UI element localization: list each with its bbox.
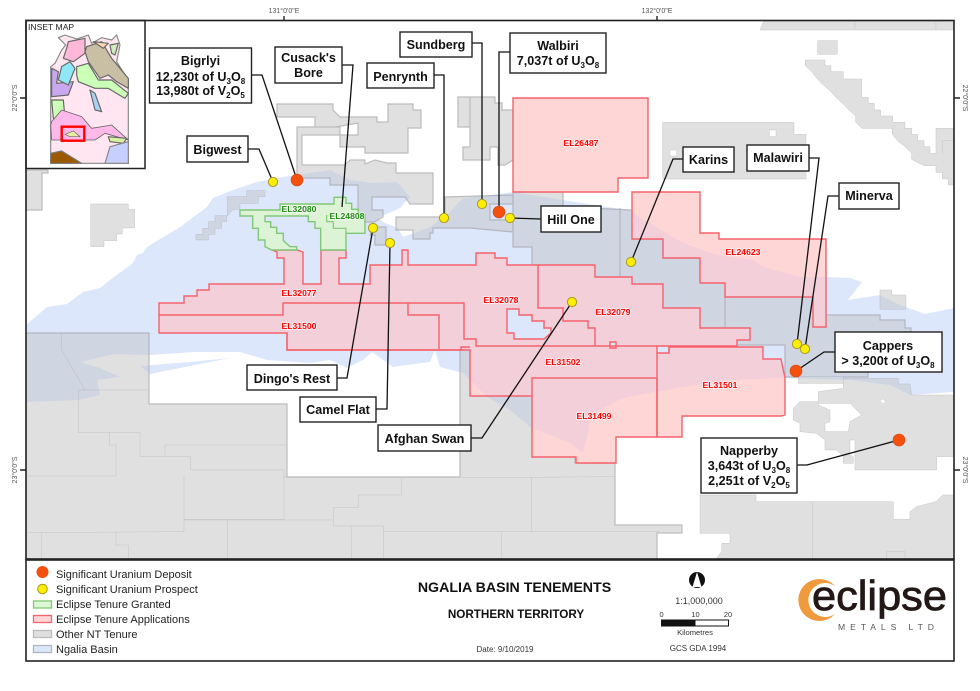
scale bar: 0 xyxy=(659,610,664,619)
callout: Cappers: Cappers xyxy=(863,339,913,353)
Eclipse tenure granted xyxy=(240,197,365,250)
tenement labels: EL32079 xyxy=(596,307,631,317)
tenement labels: EL31500 xyxy=(282,321,317,331)
legend: Significant Uranium Deposit xyxy=(56,569,192,581)
callout: Napperby: 5 xyxy=(785,481,790,490)
scale bar: GCS GDA 1994 xyxy=(670,644,727,653)
callout: Camel Flat xyxy=(300,397,376,422)
callout: Dingo's Rest: Dingo's Rest xyxy=(254,372,331,386)
callout: Bigrlyi: 8 xyxy=(241,77,246,86)
callout: Karins xyxy=(683,147,734,172)
callout: Bigrlyi: Bigrlyi xyxy=(181,54,220,68)
tenement labels: EL32080 xyxy=(282,204,317,214)
legend xyxy=(34,566,198,656)
callout: Walbiri: 8 xyxy=(595,61,600,70)
bottom panel xyxy=(26,560,954,661)
callout: Bigrlyi: 3 xyxy=(226,77,232,86)
tenement labels: EL24623 xyxy=(726,247,761,257)
callout: Cappers xyxy=(835,332,942,372)
Ngalia Basin xyxy=(26,170,954,428)
map frame and graticule xyxy=(11,7,969,559)
map frame and graticule: 23°0'0"S xyxy=(961,457,969,484)
map frame and graticule: 22°0'0"S xyxy=(11,84,19,111)
callout: Walbiri: Walbiri xyxy=(537,39,579,53)
tenement labels: EL31502 xyxy=(546,357,581,367)
callout: Cusack's Bore: Cusack's xyxy=(281,51,336,65)
legend: Eclipse Tenure Granted xyxy=(56,599,171,611)
callout: Bigrlyi xyxy=(150,48,252,103)
callout: Malawiri xyxy=(747,145,809,171)
title: NGALIA BASIN TENEMENTS xyxy=(418,580,611,596)
tenement labels: EL32077 xyxy=(282,288,317,298)
tenement labels: EL32078 xyxy=(484,295,519,305)
callout: Afghan Swan: Afghan Swan xyxy=(385,432,464,446)
callout: Napperby: 3 xyxy=(772,466,776,475)
map panel xyxy=(26,22,956,560)
logo: Eclipse Metals: METALS LTD xyxy=(838,622,934,632)
callout: Walbiri: 7,037t of U xyxy=(517,54,580,68)
callout: Cappers: O xyxy=(920,354,930,368)
callout: Bigwest: Bigwest xyxy=(193,143,242,157)
callout: Cusack's Bore xyxy=(275,47,342,83)
callout: Cappers: > 3,200t of U xyxy=(841,354,916,368)
callout: Minerva xyxy=(839,183,899,209)
callout: Afghan Swan xyxy=(378,425,471,451)
callout: Bigrlyi: 13,980t of V xyxy=(156,84,226,98)
legend: Significant Uranium Prospect xyxy=(56,584,198,596)
other NT tenure xyxy=(26,22,954,560)
logo: Eclipse Metals: eclipse xyxy=(812,572,947,619)
tenement labels: EL31501 xyxy=(703,380,738,390)
tenement labels: EL24808 xyxy=(330,211,365,221)
logo: Eclipse Metals xyxy=(798,572,947,632)
inset map xyxy=(26,20,145,168)
callout: Bigrlyi: 2 xyxy=(226,91,231,100)
scale bar: Kilometres xyxy=(677,628,713,637)
callout: Dingo's Rest xyxy=(247,365,337,390)
callout: Bigrlyi: 5 xyxy=(240,91,245,100)
tenement labels xyxy=(282,138,761,421)
legend: Other NT Tenure xyxy=(56,629,138,641)
callout: Bigrlyi: 12,230t of U xyxy=(156,70,226,84)
tenement labels: EL31499 xyxy=(577,411,612,421)
callout: Sundberg xyxy=(400,32,472,57)
callout: Bigrlyi: O xyxy=(231,84,241,98)
callout: Napperby: 3,643t of U xyxy=(708,459,772,473)
inset locator box xyxy=(62,127,84,141)
callout: Cusack's Bore: Bore xyxy=(294,66,323,80)
callout: Penrynth: Penrynth xyxy=(373,70,428,84)
scale bar xyxy=(659,596,732,653)
legend: Eclipse Tenure Applications xyxy=(56,614,190,626)
callout: Malawiri: Malawiri xyxy=(753,151,803,165)
callout: Napperby: Napperby xyxy=(720,444,778,458)
callout: Minerva: Minerva xyxy=(845,189,894,203)
callout: Napperby xyxy=(701,438,797,493)
Eclipse tenure applications xyxy=(159,98,826,463)
scale bar: 10 xyxy=(691,610,700,619)
callout: Cappers: 3 xyxy=(916,361,921,370)
callout: Napperby: 2 xyxy=(771,481,776,490)
callout: Bigwest xyxy=(187,136,248,162)
date: Date: 9/10/2019 xyxy=(477,645,534,654)
subtitle: NORTHERN TERRITORY xyxy=(448,608,584,621)
callout: Hill One: Hill One xyxy=(547,213,595,227)
callout: Napperby: O xyxy=(776,459,786,473)
callout: Penrynth xyxy=(367,63,434,88)
map frame and graticule: 23°0'0"S xyxy=(11,456,19,483)
inset map: INSET MAP xyxy=(28,22,74,32)
callout: Camel Flat: Camel Flat xyxy=(306,403,371,417)
legend: Ngalia Basin xyxy=(56,644,118,656)
map frame and graticule: 22°0'0"S xyxy=(961,85,969,112)
leader lines xyxy=(248,43,899,465)
map frame and graticule: 131°0'0"E xyxy=(269,7,300,15)
tenement labels: EL26487 xyxy=(564,138,599,148)
scale bar: 1:1,000,000 xyxy=(675,596,723,606)
callout: Karins: Karins xyxy=(689,153,728,167)
uranium deposit and prospect markers xyxy=(268,174,905,446)
callout: Sundberg: Sundberg xyxy=(407,38,465,52)
callout: Walbiri: O xyxy=(585,54,595,68)
callout: Hill One xyxy=(541,206,601,232)
callout: Cappers: 8 xyxy=(930,361,935,370)
callout: Napperby: O xyxy=(776,474,786,488)
icon: north arrow xyxy=(689,572,705,588)
callout: Walbiri xyxy=(510,33,606,73)
map frame and graticule: 132°0'0"E xyxy=(642,7,673,15)
callout: Bigrlyi: O xyxy=(231,70,241,84)
scale bar: 20 xyxy=(724,610,732,619)
callout: Walbiri: 3 xyxy=(580,61,586,70)
callout: Napperby: 2,251t of V xyxy=(708,474,771,488)
callout: Napperby: 8 xyxy=(786,466,791,475)
